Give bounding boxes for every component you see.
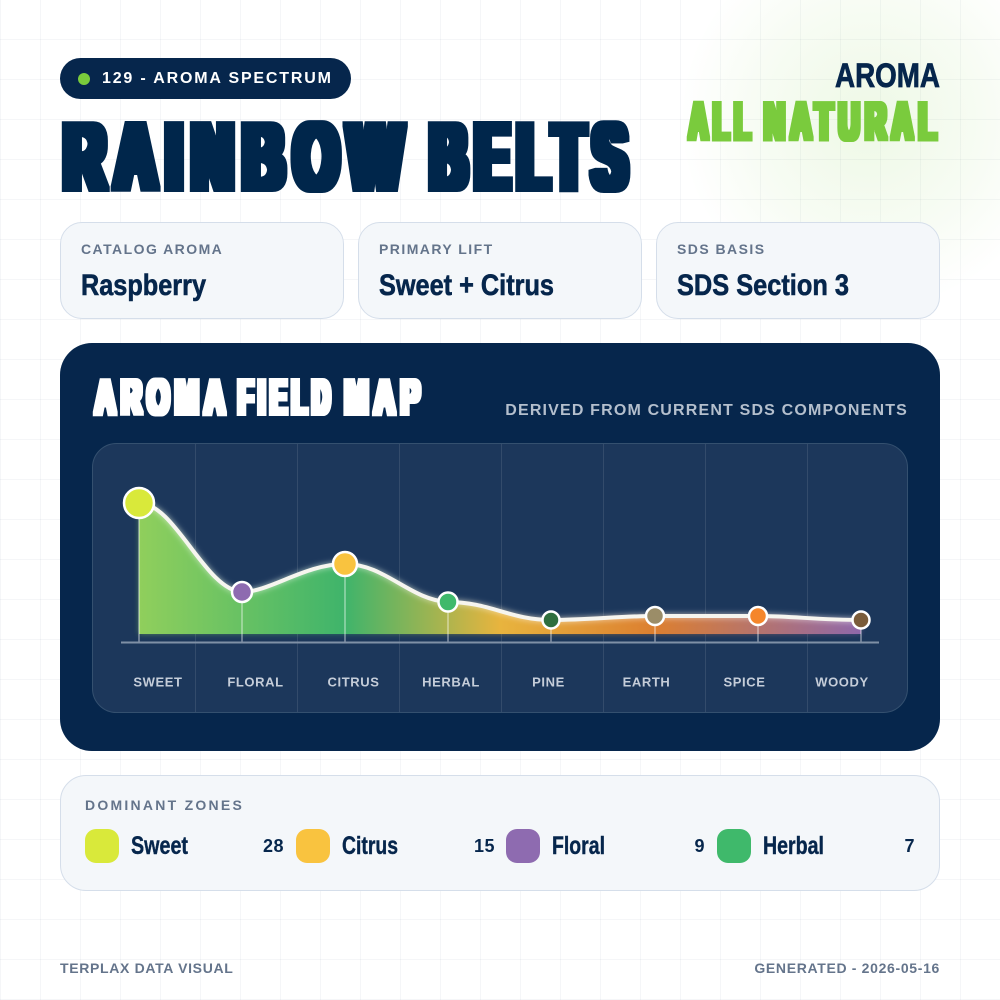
card: catalog aroma bbox=[60, 222, 344, 319]
card value: Raspberry bbox=[81, 269, 206, 302]
zone chip: sweet bbox=[85, 829, 119, 863]
category labels: PINE bbox=[532, 674, 565, 690]
card value: SDS Section 3 bbox=[677, 269, 849, 302]
zone name: floral: Floral bbox=[552, 832, 605, 860]
zone chip: floral bbox=[506, 829, 540, 863]
zone value: floral: 9 bbox=[694, 836, 705, 856]
pill label: 129 - AROMA SPECTRUM bbox=[102, 70, 333, 87]
stems bbox=[139, 503, 861, 642]
zone name: citrus: Citrus bbox=[342, 832, 398, 860]
curve glow bbox=[139, 503, 861, 620]
category labels: HERBAL bbox=[422, 674, 480, 690]
card label: PRIMARY LIFT bbox=[379, 241, 494, 257]
card: primary lift bbox=[358, 222, 642, 319]
axis bbox=[121, 642, 879, 644]
footer left: TERPLAX DATA VISUAL bbox=[60, 960, 233, 976]
card value: Sweet + Citrus bbox=[379, 269, 554, 302]
zone chip: herbal bbox=[717, 829, 751, 863]
category labels: SWEET bbox=[133, 674, 183, 690]
card: sds basis bbox=[656, 222, 940, 319]
category labels: CITRUS bbox=[328, 674, 380, 690]
zone value: citrus: 15 bbox=[474, 836, 495, 856]
title: RAINBOW bbox=[64, 104, 412, 210]
zone name: sweet: Sweet bbox=[131, 832, 189, 860]
category labels: EARTH bbox=[623, 674, 670, 690]
panel heading: FIELD bbox=[238, 371, 335, 425]
icon: green dot bbox=[78, 73, 90, 85]
area fill bbox=[139, 503, 861, 634]
chart background panel bbox=[92, 444, 908, 712]
zones heading: DOMINANT ZONES bbox=[85, 797, 244, 813]
data points bbox=[124, 488, 870, 628]
tag pill bbox=[60, 58, 351, 99]
category labels bbox=[133, 674, 869, 690]
zone chip: citrus bbox=[296, 829, 330, 863]
column dividers bbox=[196, 444, 808, 712]
category labels: SPICE bbox=[723, 674, 766, 690]
panel subtitle: DERIVED FROM CURRENT SDS COMPONENTS bbox=[505, 402, 908, 419]
footer right: GENERATED - 2026-05-16 bbox=[754, 960, 940, 976]
category labels: WOODY bbox=[815, 674, 869, 690]
all natural badge text: ALL bbox=[689, 92, 756, 150]
area glow bbox=[139, 503, 861, 634]
card label: CATALOG AROMA bbox=[81, 241, 223, 257]
zone value: sweet: 28 bbox=[263, 836, 284, 856]
category labels: FLORAL bbox=[227, 674, 284, 690]
panel: dominant zones bbox=[60, 775, 940, 891]
panel heading: AROMA bbox=[95, 371, 230, 425]
panel: aroma field map bbox=[60, 343, 940, 751]
card label: SDS BASIS bbox=[677, 241, 766, 257]
zone value: herbal: 7 bbox=[904, 836, 915, 856]
all natural badge text bbox=[686, 92, 942, 150]
curve line bbox=[139, 503, 861, 620]
